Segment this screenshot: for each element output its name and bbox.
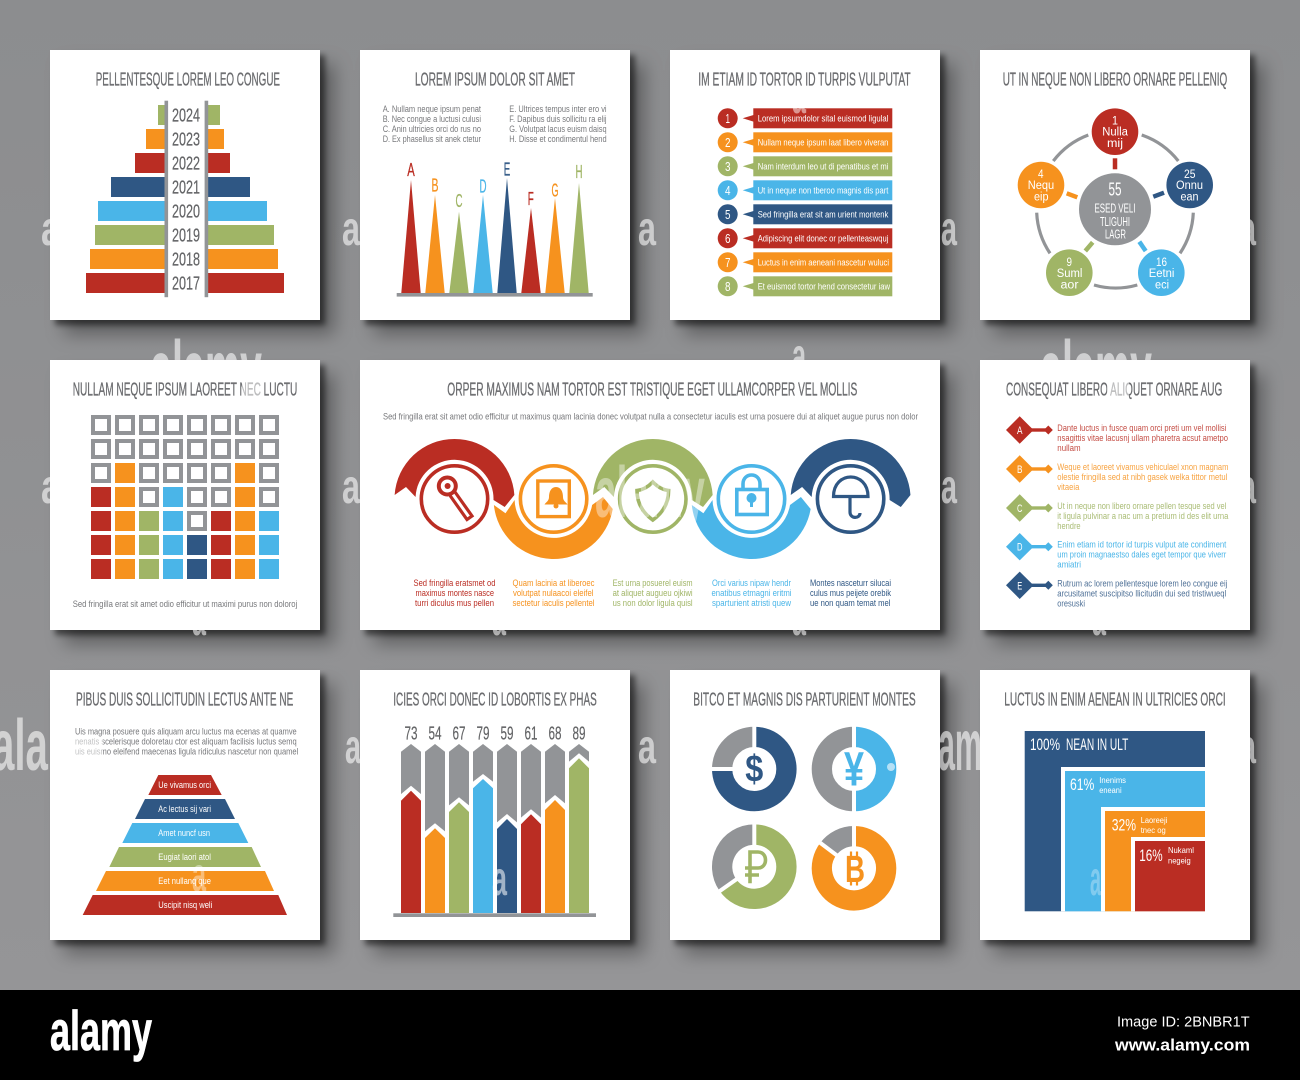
- list row 4: 4: [725, 183, 730, 198]
- item D: Enim etiam id tortor id turpis vulput ate condiment: [1057, 540, 1227, 550]
- year labels: 2020: [172, 202, 200, 222]
- square: 61 percent: eneani: [1099, 786, 1122, 795]
- node: light blue: eci: [1155, 280, 1169, 292]
- watermark over panels: [75, 71, 1129, 906]
- tier 3: Amet nuncf usn: [158, 828, 210, 838]
- caption: green step: at aliquet augueu ojkiwi: [613, 588, 693, 598]
- node: green: 9: [1066, 257, 1072, 269]
- item D: amiatri: [1057, 560, 1081, 570]
- list row 5: Sed fringilla erat sit am urient montenk: [758, 209, 889, 219]
- chart: waffle of filled squares: [91, 463, 279, 579]
- panel: numbered list: [670, 50, 940, 320]
- caption: navy step: [810, 578, 891, 608]
- list row 6: [718, 228, 892, 248]
- square: 16 percent: negeig: [1168, 856, 1191, 866]
- square: 61 percent: 61%: [1070, 775, 1094, 794]
- node: light blue: [1138, 249, 1185, 296]
- watermark over panels: alamy: [595, 453, 705, 533]
- ribbon segments: [395, 439, 910, 559]
- node: orange: Nequ: [1028, 180, 1054, 192]
- watermark in the gaps between panels: a: [345, 721, 361, 774]
- watermark over panels: a: [792, 71, 806, 124]
- list row 1: [718, 108, 892, 128]
- watermark in the gaps between panels: a: [792, 593, 806, 646]
- tier 4: Eugiat laori atol: [158, 852, 211, 862]
- tier 5: Eet nullanq que: [158, 876, 211, 886]
- caption: blue step: enatibus etmagni eritmi: [712, 588, 792, 598]
- item C: C: [1017, 503, 1023, 515]
- footer bar: [0, 990, 1300, 1080]
- item B: vitaeia: [1057, 482, 1079, 492]
- square: 100 percent: 100%: [1030, 735, 1060, 754]
- centre node: [1079, 173, 1151, 245]
- tier 2: Ac lectus sij vari: [158, 804, 211, 814]
- chart: spike triangles: [397, 160, 593, 297]
- node: red: Nulla: [1102, 126, 1128, 138]
- square: 100 percent: [1025, 731, 1205, 911]
- square: 16 percent: Nukaml: [1168, 846, 1194, 855]
- caption: red step: maximus montes nasce: [416, 588, 494, 598]
- list row 8: [718, 276, 892, 296]
- watermark in the gaps between panels: a: [342, 203, 360, 256]
- item E: E: [1017, 580, 1022, 592]
- watermark in the gaps between panels: a: [492, 593, 506, 646]
- chart: coloured value arrows: [393, 758, 596, 917]
- list row 7: Luctus in enim aeneani nascetur wuluci: [758, 257, 889, 267]
- chart: mirrored year bars: [86, 101, 284, 297]
- item B: Weque et laoreet vivamus vehiculael xnon magnam: [1057, 462, 1228, 472]
- item B: [1006, 455, 1228, 492]
- legend text: D. Ex phasellus sit anek ctetur: [383, 134, 481, 144]
- list row 3: 3: [725, 159, 730, 174]
- intro text: uis euismo eleifend maecenas ligula ridiculus nascetur non quamel: [75, 746, 298, 756]
- intro text: [75, 726, 298, 756]
- panel: currency donuts: [670, 670, 940, 940]
- list row 8: Et euismod tortor hend consectetur iaw: [758, 281, 890, 291]
- icon: padlock: [718, 466, 785, 532]
- panel: cycle diagram: [980, 50, 1250, 320]
- node: red: 1: [1112, 116, 1118, 128]
- heading: ORPER MAXIMUS NAM TORTOR EST TRISTIQUE EGET ULLAMCORPER VEL MOLLIS: [447, 380, 857, 400]
- watermark in the gaps between panels: a: [1092, 593, 1106, 646]
- node: navy: ean: [1180, 192, 1198, 204]
- item E: oresuski: [1057, 598, 1085, 608]
- tier 6: [83, 895, 287, 915]
- square: 100 percent: NEAN IN ULT: [1066, 735, 1128, 754]
- caption: green step: [613, 578, 693, 608]
- node: red: mij: [1107, 138, 1123, 150]
- chart: spike triangles: G: [552, 181, 558, 201]
- caption: blue step: Orci varius nipaw hendr: [712, 578, 791, 588]
- watermark in the gaps between panels: am: [938, 706, 982, 786]
- chart: value labels: 79: [476, 723, 490, 743]
- icon: key: [421, 466, 488, 532]
- node: orange: 4: [1038, 169, 1044, 181]
- donut: yen: ¥: [844, 744, 864, 796]
- list row 1: 1: [726, 111, 730, 126]
- centre node: ESED VELI: [1094, 202, 1136, 216]
- chart: value labels: 61: [524, 723, 538, 743]
- caption: navy step: ue non quam temat mel: [810, 598, 890, 608]
- item A: Dante luctus in fusce quam orci preti um vel mollisi: [1057, 423, 1226, 433]
- spokes: [1067, 158, 1164, 251]
- watermark in the gaps between panels: a: [941, 203, 957, 256]
- node: light blue: 16: [1156, 257, 1167, 269]
- caption: red step: Sed fringilla eratsmet od: [414, 578, 496, 588]
- caption: green step: Est urna posuerel euism: [613, 578, 693, 588]
- heading: LOREM IPSUM DOLOR SIT AMET: [415, 70, 575, 90]
- year labels: 2017: [172, 274, 200, 294]
- square: 61 percent: [1061, 767, 1205, 911]
- item C: hendre: [1057, 521, 1081, 531]
- heading: PELLENTESQUE LOREM LEO CONGUE: [96, 70, 280, 90]
- square: 61 percent: Inenims: [1099, 776, 1126, 785]
- panel: stacked pyramid: [50, 670, 320, 940]
- chart: waffle of hollow squares: [93, 417, 277, 529]
- watermark in the gaps between panels: a: [41, 203, 61, 256]
- year labels: 2018: [172, 250, 200, 270]
- heading: NULLAM NEQUE IPSUM LAOREET NEC LUCTU: [73, 380, 297, 400]
- item D: [1006, 533, 1227, 570]
- chart: spike triangles: A: [407, 160, 415, 180]
- node: orange: [1018, 162, 1064, 208]
- square: 16 percent: 16%: [1139, 846, 1163, 865]
- legend text: B. Nec congue a luctusi culusi: [383, 114, 481, 124]
- item E: [1006, 572, 1227, 608]
- donut: dollar: $: [745, 749, 763, 791]
- watermark in the gaps between panels: alamy: [1040, 324, 1152, 412]
- watermark in the gaps between panels: [0, 203, 1256, 786]
- node: green: [1046, 249, 1093, 296]
- node: navy: Onnu: [1176, 180, 1203, 192]
- legend text: F. Dapibus duis sollicitu ra elij: [509, 114, 607, 124]
- outer ring segments: [1037, 135, 1193, 288]
- image id: Image ID: 2BNBR1T: [1117, 1014, 1250, 1031]
- node: red: [1092, 108, 1138, 155]
- chart: spike triangles: F: [528, 189, 534, 209]
- node: green: aor: [1060, 280, 1079, 292]
- list row 8: 8: [725, 279, 730, 294]
- centre node: TLIGUHI: [1100, 215, 1130, 229]
- website: www.alamy.com: [1114, 1036, 1250, 1055]
- donut: dollar: [709, 724, 786, 801]
- year labels: 2022: [172, 154, 200, 174]
- icon: safe with bell: [520, 466, 587, 532]
- item D: D: [1017, 542, 1023, 554]
- chart: gray arrow tracks: [401, 744, 589, 913]
- node: light blue: Eetni: [1149, 268, 1174, 280]
- list row 2: 2: [725, 135, 730, 150]
- watermark in the gaps between panels: a: [1240, 721, 1256, 774]
- list row 5: [718, 204, 892, 224]
- tier 3: [122, 823, 248, 843]
- node: green: Suml: [1057, 268, 1082, 280]
- watermark in the gaps between panels: a: [342, 461, 360, 514]
- chart: spike triangles: H: [576, 162, 582, 182]
- chart: value labels: 89: [572, 723, 586, 743]
- year labels: 2024: [172, 106, 200, 126]
- intro text: Uis magna posuere quis aliquam arcu luctus ma ecenas at quamve: [75, 726, 297, 736]
- tier 1: [148, 775, 222, 795]
- panel: year pyramid: [50, 50, 320, 320]
- node: orange: eip: [1034, 192, 1048, 204]
- watermark in the gaps between panels: a: [192, 593, 206, 646]
- year labels: 2019: [172, 226, 200, 246]
- square: 32 percent: 32%: [1112, 815, 1136, 834]
- square: 32 percent: Laoreeji: [1141, 816, 1168, 825]
- caption: orange step: [512, 578, 595, 608]
- watermark in the gaps between panels: alamy: [150, 324, 262, 412]
- chart: value labels: 54: [428, 723, 442, 743]
- square: 32 percent: [1101, 807, 1205, 911]
- panel: arrow bar chart: [360, 670, 630, 940]
- list row 3: [718, 156, 892, 176]
- chart: spike triangles: C: [456, 191, 462, 211]
- chart: spike triangles: D: [480, 177, 486, 197]
- chart: value labels: 67: [452, 723, 466, 743]
- icon: umbrella: [817, 466, 884, 532]
- caption: Sed fringilla erat sit amet odio efficitur ut maximi purus non doloroj: [73, 599, 297, 609]
- item A: nsagittis vitae lacusnj ullam pharetra acsut ametpo: [1057, 433, 1228, 443]
- watermark in the gaps between panels: a: [638, 721, 656, 774]
- item C: [1006, 494, 1228, 531]
- heading: BITCO ET MAGNIS DIS PARTURIENT MONTES: [693, 690, 916, 710]
- watermark in the gaps between panels: a: [638, 203, 656, 256]
- legend text: E. Ultrices tempus inter ero vi: [509, 104, 607, 114]
- item A: A: [1017, 425, 1023, 437]
- heading: ICIES ORCI DONEC ID LOBORTIS EX PHAS: [393, 690, 597, 710]
- legend text: A. Nullam neque ipsum penat: [383, 104, 481, 114]
- caption: green step: us non dolor ligula quisl: [613, 598, 693, 608]
- donut: bitcoin: B: [845, 849, 865, 891]
- legend text: H. Disse et condimentul hend: [509, 134, 607, 144]
- list row 5: 5: [725, 207, 730, 222]
- tier 5: [96, 871, 274, 891]
- chart: value labels: 59: [500, 723, 514, 743]
- watermark in the gaps between panels: a: [1240, 461, 1256, 514]
- list row 6: Adipiscing elit donec or pellenteaswquj: [758, 233, 888, 243]
- tier 2: [135, 799, 235, 819]
- year labels: 2023: [172, 130, 200, 150]
- icon: shield: [620, 466, 686, 532]
- item B: olestie fringilla sed at nibh gasek welka tittor metul: [1057, 472, 1227, 482]
- intro text: Sed fringilla erat sit amet odio efficitur ut maximus quam lacinia donec volutpat nulla a consectetur iaculis est urna posuere dui at aliquet augue purus non dolor: [383, 412, 918, 422]
- item A: nullam: [1057, 443, 1081, 453]
- item D: um proin magnaestso dales eget tempor que viverr: [1057, 550, 1226, 560]
- list row 4: Ut in neque non tberoo magnis dis part: [758, 185, 889, 195]
- list row 3: Nam interdum leo ut di penatibus et mi: [758, 161, 888, 171]
- panel: ribbon process: [360, 360, 940, 630]
- list row 2: Nullam neque ipsum laat libero viveran: [758, 137, 888, 147]
- item C: it ligula pulvinar a nac um a pretium id des elit urna: [1057, 511, 1228, 521]
- chart: value labels: [404, 723, 586, 743]
- watermark in the gaps between panels: a: [1240, 203, 1256, 256]
- caption: blue step: [712, 578, 792, 608]
- node: navy: [1166, 162, 1213, 208]
- panel: triangle chart: [360, 50, 630, 320]
- tier 4: [109, 847, 261, 867]
- watermark in the gaps between panels: a: [792, 330, 806, 383]
- item E: arcusitamet suscipitso llicitudin dui sed tristiwueql: [1057, 588, 1226, 598]
- watermark in the gaps between panels: a: [941, 461, 957, 514]
- legend text: [383, 104, 607, 144]
- square: 32 percent: tnec og: [1141, 826, 1166, 835]
- square: 16 percent: [1131, 837, 1205, 911]
- watermark in the gaps between panels: a: [41, 461, 61, 514]
- caption: red step: turri diculus mus pellen: [415, 598, 494, 608]
- tier 6: Uscipit nisq weli: [158, 900, 212, 910]
- panel: square grid: [50, 360, 320, 630]
- caption: blue step: sparturient atristi quew: [712, 598, 791, 608]
- intro text: nenatis scelerisque doloretau ctor est aliquam facilisis luctus semq: [75, 736, 297, 746]
- donut: yen: [822, 724, 886, 814]
- footer logo: alamy: [50, 999, 152, 1062]
- list row 6: 6: [725, 231, 730, 246]
- watermark over panels: a: [1090, 853, 1101, 906]
- donut: ruble: [717, 822, 786, 899]
- list row 2: [718, 132, 892, 152]
- list row 4: [718, 180, 892, 200]
- donut: bitcoin: [817, 824, 886, 900]
- list row 7: 7: [725, 255, 730, 270]
- node: navy: 25: [1184, 169, 1196, 181]
- centre node: 55: [1108, 180, 1122, 200]
- caption: navy step: Montes nasceturr silucai: [810, 578, 891, 588]
- chart: spike triangles: E: [504, 160, 510, 180]
- list row 7: [718, 252, 892, 272]
- list row 1: Lorem ipsumdolor sital euismod ligulal: [758, 113, 888, 123]
- centre node: LAGR: [1105, 228, 1126, 242]
- legend text: C. Anin ultricies orci do rus no: [383, 124, 481, 134]
- year labels: [172, 106, 200, 294]
- item C: Ut in neque non libero ornare pellen tesque sed vel: [1057, 501, 1226, 511]
- chart: white cut-outs: [399, 753, 591, 913]
- item E: Rutrum ac lorem pellentesque lorem leo congue eij: [1057, 578, 1227, 588]
- year labels: 2021: [172, 178, 200, 198]
- caption: orange step: volutpat nulaacoi eleifel: [513, 588, 594, 598]
- caption: orange step: sectetur iaculis pellentel: [512, 598, 594, 608]
- chart: spike triangles: B: [432, 176, 438, 196]
- heading: IM ETIAM ID TORTOR ID TURPIS VULPUTAT: [698, 70, 911, 90]
- item B: B: [1017, 464, 1022, 476]
- heading: PIBUS DUIS SOLLICITUDIN LECTUS ANTE NE: [76, 690, 293, 710]
- chart: value labels: 68: [548, 723, 562, 743]
- panel: diamond list: [980, 360, 1250, 630]
- legend text: G. Volutpat lacus euism daisq: [509, 124, 607, 134]
- tier 1: Ue vivamus orci: [158, 780, 211, 790]
- chart: value labels: 73: [404, 723, 418, 743]
- item A: [1006, 416, 1228, 453]
- caption: navy step: culus mus peijete orebik: [810, 588, 891, 598]
- panel: nested squares: [980, 670, 1250, 940]
- caption: red step: [414, 578, 496, 608]
- watermark over panels: a: [192, 849, 206, 902]
- watermark over panels: a: [492, 853, 507, 906]
- caption: orange step: Quam lacinia at liberoec: [512, 578, 595, 588]
